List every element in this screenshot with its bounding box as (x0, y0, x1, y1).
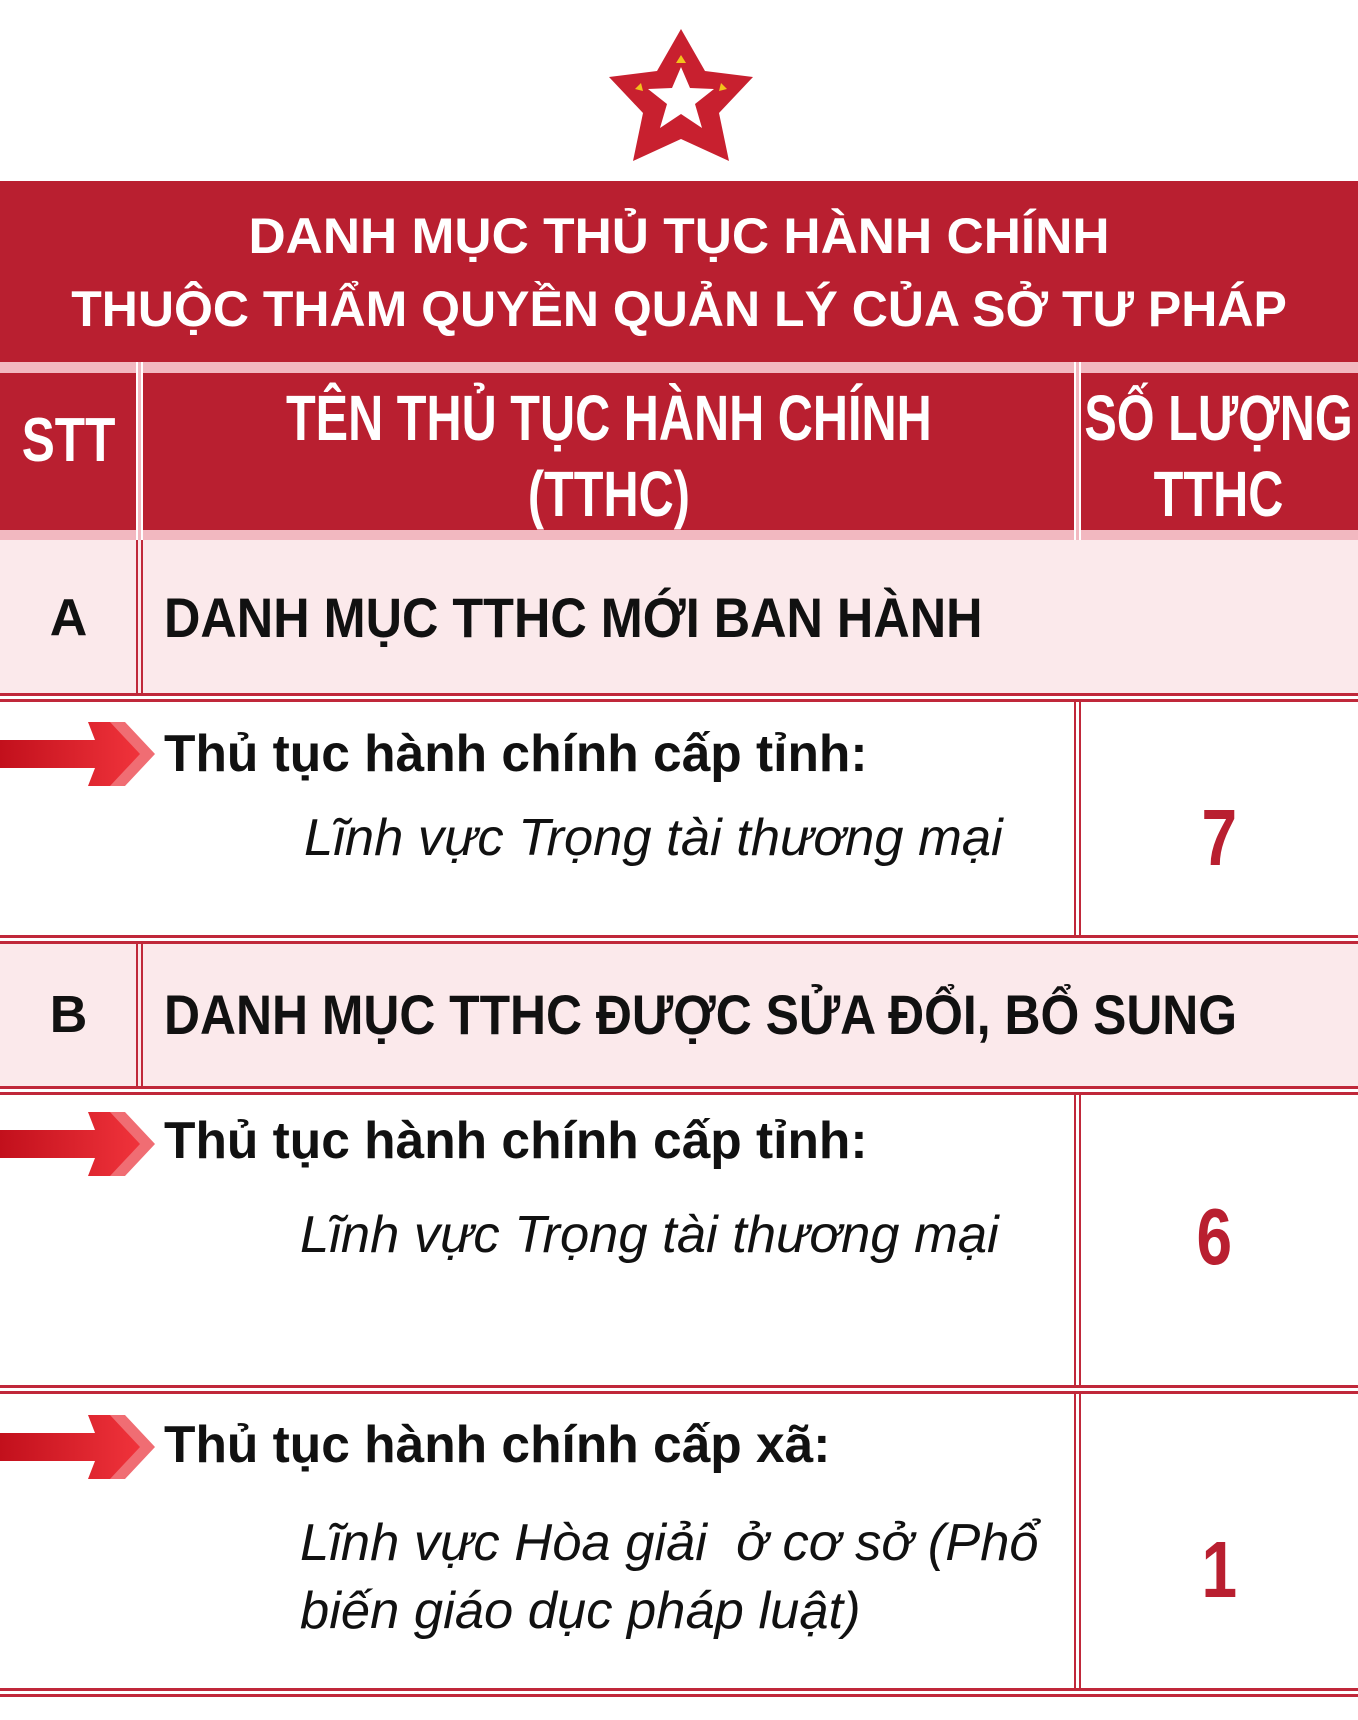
logo (609, 29, 753, 161)
header: so luong (1085, 382, 1353, 530)
field: Lĩnh vực Trọng tài thương mại (300, 1206, 999, 1264)
row B2 (0, 1415, 1237, 1640)
header: ten thu tuc: (TTHC) (528, 458, 690, 530)
row B title: DANH MỤC TTHC ĐƯỢC SỬA ĐỔI, BỔ SUNG (164, 983, 1237, 1046)
row B (0, 944, 1358, 1086)
header: so luong: SỐ LƯỢNG (1085, 382, 1353, 454)
row A title: DANH MỤC TTHC MỚI BAN HÀNH (164, 586, 983, 649)
field: Lĩnh vực Trọng tài thương mại (304, 809, 1003, 867)
number 7: 7 (1202, 793, 1237, 882)
field: Lĩnh vực Hòa giải ở cơ sở (Phổ (300, 1514, 1039, 1572)
table header row (0, 362, 1358, 540)
arrow (0, 1112, 155, 1176)
heading: Thủ tục hành chính cấp tỉnh: (164, 1112, 868, 1170)
row A (0, 540, 1358, 694)
header: so luong: TTHC (1154, 458, 1284, 530)
header: ten thu tuc: TÊN THỦ TỤC HÀNH CHÍNH (286, 382, 932, 454)
field: biến giáo dục pháp luật) (300, 1582, 861, 1640)
heading: Thủ tục hành chính cấp tỉnh: (164, 725, 868, 783)
header: STT: STT (22, 406, 115, 475)
arrow (0, 722, 155, 786)
header: ten thu tuc (286, 382, 932, 530)
number 1: 1 (1202, 1525, 1237, 1614)
label A: A (50, 589, 87, 647)
title banner (0, 181, 1358, 362)
row B1 (0, 1112, 1232, 1281)
number 6: 6 (1196, 1192, 1232, 1281)
arrow (0, 1415, 155, 1479)
label B: B (50, 986, 87, 1044)
field (300, 1514, 1041, 1640)
heading: Thủ tục hành chính cấp xã: (164, 1416, 830, 1474)
row A1 (0, 722, 1237, 882)
title line 1: DANH MỤC THỦ TỤC HÀNH CHÍNH (248, 208, 1110, 264)
title line 2: THUỘC THẨM QUYỀN QUẢN LÝ CỦA SỞ TƯ PHÁP (71, 281, 1287, 337)
